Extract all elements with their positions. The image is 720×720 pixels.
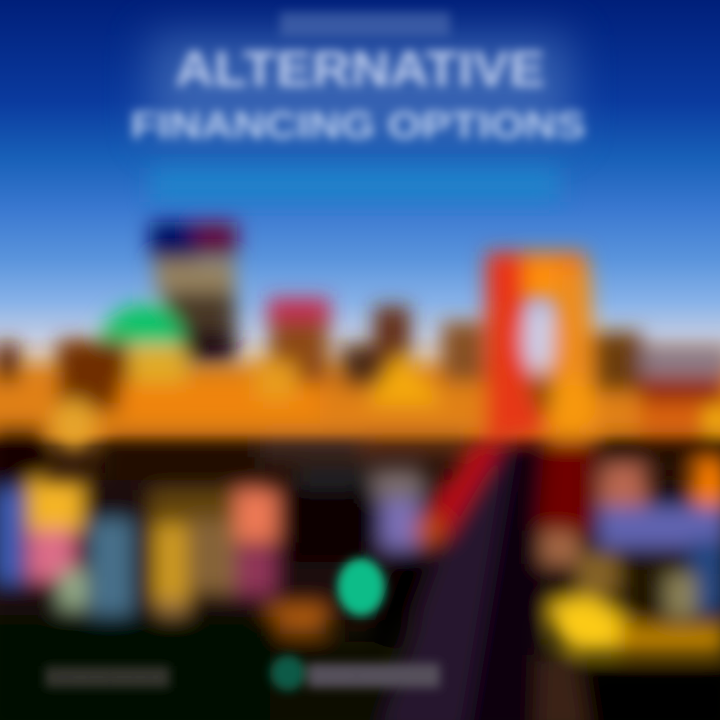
label bbox=[308, 663, 440, 688]
glow behind title bbox=[150, 35, 570, 140]
centre shadow bbox=[526, 378, 554, 414]
title line two: FINANCING OPTIONS bbox=[130, 105, 586, 147]
warm horizon glow bbox=[0, 372, 720, 430]
tower frame bbox=[486, 252, 596, 442]
footer left label: Learn more bbox=[47, 669, 167, 686]
green icon bbox=[270, 655, 306, 691]
dark shoreline bbox=[0, 426, 44, 484]
title block bbox=[130, 12, 586, 147]
bridge deck road bbox=[378, 445, 545, 720]
footer right badge: Get started bbox=[310, 668, 438, 685]
dark foreground foliage bbox=[0, 615, 280, 720]
bridge cables bbox=[420, 438, 502, 540]
eyebrow line bbox=[280, 12, 450, 36]
dark water bbox=[0, 480, 720, 620]
skyline buildings bbox=[0, 298, 642, 410]
bright waterfront streak bbox=[120, 383, 320, 419]
right waterfront lights bbox=[534, 460, 720, 654]
brown strip bbox=[530, 655, 590, 720]
teal glow circle bbox=[337, 558, 385, 616]
water reflections centre bbox=[372, 468, 422, 500]
title line one: ALTERNATIVE bbox=[175, 41, 545, 97]
subtitle band bbox=[150, 168, 560, 202]
tall tower bbox=[150, 222, 237, 364]
footer right badge bbox=[270, 655, 440, 691]
right horizon bands bbox=[640, 376, 720, 404]
city scene bbox=[0, 222, 720, 720]
tower opening bbox=[524, 308, 552, 372]
black gap left of road bbox=[368, 556, 432, 650]
water reflections left bbox=[0, 468, 366, 634]
green dome bbox=[98, 304, 184, 344]
footer left label bbox=[45, 666, 170, 688]
left yellow glow bbox=[52, 399, 96, 451]
right horizon haze bbox=[640, 345, 720, 375]
